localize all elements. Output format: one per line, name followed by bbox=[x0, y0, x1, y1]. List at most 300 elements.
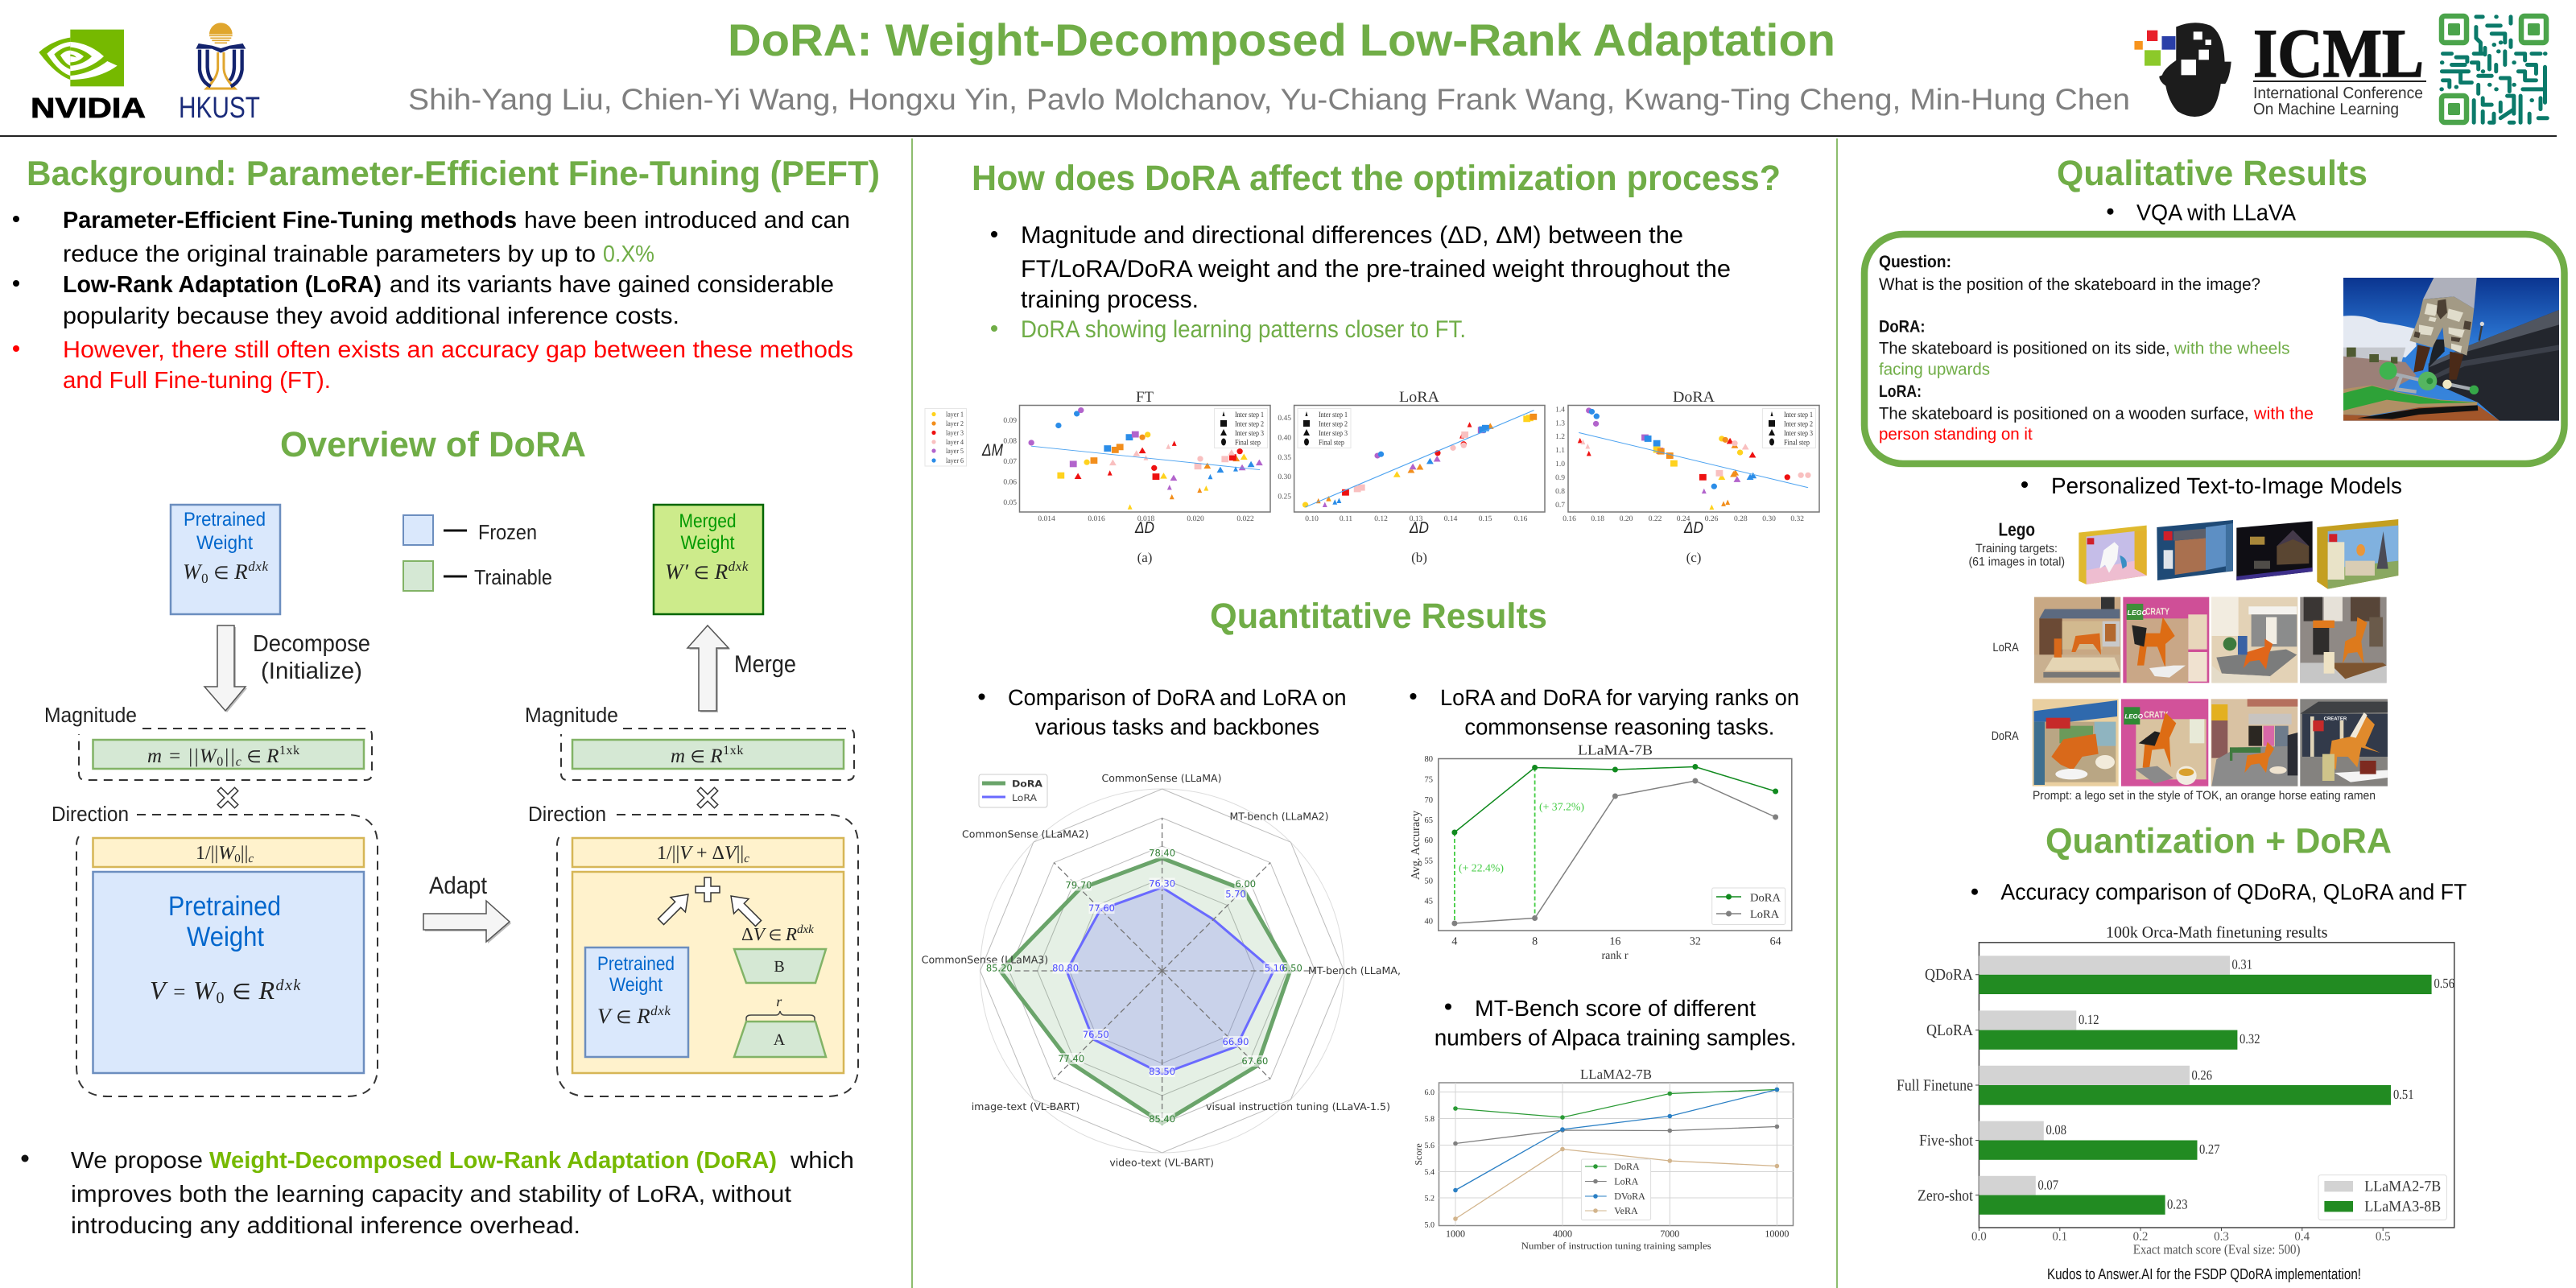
bar chart: 0.12 bbox=[2079, 1012, 2099, 1027]
direction block: right: Direction bbox=[528, 802, 606, 826]
line chart: LLaMA-7B ranks: rank r bbox=[1601, 950, 1629, 962]
radar chart: 80.80 bbox=[1052, 963, 1079, 974]
bar chart: Zero-shot bbox=[1918, 1187, 1973, 1204]
scatter chart: DoRA: 0.8 bbox=[1555, 488, 1565, 496]
arrow: pretrained to plus bbox=[654, 887, 696, 929]
right column divider bbox=[1836, 138, 1838, 1288]
bar chart: 0.07 bbox=[2038, 1177, 2058, 1193]
arrow: merge: Merge bbox=[734, 651, 796, 678]
scatter chart: DoRA: 1.4 bbox=[1555, 407, 1565, 415]
radar chart: CommonSense (LLaMA2) bbox=[962, 828, 1088, 840]
chart legend: DoRA bbox=[1614, 1161, 1640, 1172]
heading: quantitative: Quantitative Results bbox=[1210, 597, 1547, 636]
VQA text: with the wheels bbox=[2174, 339, 2289, 357]
direction block: left: dxk bbox=[276, 976, 302, 994]
scatter legend: layers: layer 5 bbox=[946, 447, 964, 455]
arrow: decompose: (Initialize) bbox=[261, 658, 362, 684]
magnitude block: right: m ∈ R bbox=[671, 745, 723, 767]
scatter chart: LoRA: Final step bbox=[1319, 440, 1344, 448]
lego caption: Lego bbox=[1998, 518, 2035, 539]
scatter chart: FT: 0.014 bbox=[1038, 515, 1055, 523]
text: accuracy comparison: Accuracy comparison of QDoRA, QLoRA and FT bbox=[2000, 879, 2467, 904]
scatter chart: LoRA: 0.40 bbox=[1278, 435, 1291, 443]
VQA text bbox=[1879, 253, 2314, 444]
image: DoRA sample 2: CRATY bbox=[2144, 710, 2168, 720]
image: DoRA sample 4 bbox=[2300, 699, 2388, 786]
text: rank caption bbox=[1410, 685, 1799, 739]
image: LoRA sample 2: LEGO bbox=[2128, 609, 2147, 617]
line chart: LLaMA2-7B samples: 5.2 bbox=[1425, 1195, 1435, 1203]
scatter chart: FT: 0.022 bbox=[1236, 515, 1254, 523]
direction block: left: || bbox=[241, 843, 248, 864]
image: LoRA sample 2: CRATY bbox=[2145, 605, 2169, 617]
line chart: LLaMA2-7B samples: 6.0 bbox=[1425, 1088, 1435, 1097]
scatter chart: LoRA: 0.25 bbox=[1278, 493, 1291, 501]
scatter chart: FT: Inter step 3 bbox=[1235, 430, 1264, 438]
direction block: left: V = W bbox=[150, 976, 216, 1005]
radar chart: 85.20 bbox=[986, 963, 1013, 974]
scatter chart: FT: FT bbox=[1136, 389, 1154, 406]
box: pretrained weight: Pretrained bbox=[184, 509, 266, 530]
scatter chart: DoRA: 0.24 bbox=[1677, 515, 1690, 523]
magnitude block: left: || bbox=[224, 745, 236, 767]
radar chart bbox=[922, 772, 1401, 1169]
scatter chart: DoRA: 1.1 bbox=[1555, 447, 1565, 455]
radar chart: image-text (VL-BART) bbox=[972, 1100, 1080, 1113]
scatter chart: DoRA: Inter step 2 bbox=[1784, 420, 1813, 428]
scatter chart: DoRA: 0.20 bbox=[1620, 515, 1633, 523]
VQA text: facing upwards bbox=[1879, 361, 1990, 379]
line chart: LLaMA-7B ranks: 75 bbox=[1425, 776, 1433, 784]
image: DoRA sample 2 bbox=[2121, 699, 2208, 786]
scatter chart: FT: 0.018 bbox=[1137, 515, 1154, 523]
scatter chart: LoRA: 0.10 bbox=[1305, 515, 1319, 523]
image: DoRA sample 2: LEGO bbox=[2124, 713, 2143, 720]
box: pretrained weight: ∈ bbox=[208, 563, 234, 583]
radar chart: 76.50 bbox=[1083, 1029, 1109, 1040]
text: MT-Bench caption bbox=[1435, 996, 1797, 1050]
bar chart: 0.1 bbox=[2052, 1230, 2067, 1243]
proposal text: improves both the learning capacity and stability of LoRA, without bbox=[71, 1182, 791, 1208]
magnitude block: left: 0 bbox=[217, 755, 224, 769]
radar chart: MT-bench (LLaMA2) bbox=[1230, 810, 1328, 823]
bar chart: 0.2 bbox=[2133, 1230, 2148, 1243]
box: pretrained weight: Weight bbox=[196, 532, 253, 554]
low-rank matrices: B bbox=[774, 958, 785, 976]
box: merged weight: dxk bbox=[729, 559, 749, 574]
authors: Shih-Yang Liu, Chien-Yi Wang, Hongxu Yin, Pavlo Molchanov, Yu-Chiang Frank Wang, Kwang-Ting Cheng, Min-Hung Chen bbox=[408, 83, 2130, 116]
proposal text bbox=[21, 1148, 854, 1239]
logo: ICML wordmark: On Machine Learning bbox=[2253, 101, 2399, 118]
image: LoRA sample 4 bbox=[2300, 597, 2387, 683]
image: target 1 bbox=[2079, 526, 2147, 584]
bullet list: background: Parameter-Efficient Fine-Tuning methods bbox=[63, 208, 517, 233]
chart legend: DVoRA bbox=[1614, 1191, 1645, 1202]
radar chart: 6.50 bbox=[1282, 963, 1302, 974]
heading: overview: Overview of DoRA bbox=[280, 425, 586, 464]
box: pretrained weight: R bbox=[234, 559, 248, 584]
caption: prompt: Prompt: a lego set in the style of TOK, an orange horse eating ramen bbox=[2033, 789, 2376, 803]
line chart: LLaMA-7B ranks: (+ 22.4%) bbox=[1459, 861, 1504, 874]
radar chart: 77.60 bbox=[1088, 902, 1115, 914]
scatter chart: LoRA: ΔD bbox=[1409, 519, 1429, 537]
scatter chart: DoRA: DoRA bbox=[1673, 389, 1715, 406]
panel: overview of DoRA bbox=[44, 425, 858, 1096]
icon: multiply left bbox=[211, 781, 245, 815]
low-rank matrices: ΔV ∈ R bbox=[741, 924, 797, 944]
radar legend bbox=[979, 774, 1047, 807]
panel: quantitative results bbox=[922, 597, 1799, 1251]
line chart: LLaMA2-7B samples: 4000 bbox=[1553, 1228, 1572, 1240]
direction block: left: ∈ bbox=[225, 980, 258, 1004]
radar legend: DoRA bbox=[1012, 778, 1042, 789]
line chart: LLaMA2-7B samples: 5.4 bbox=[1425, 1168, 1435, 1177]
scatter chart: DoRA: 0.22 bbox=[1649, 515, 1662, 523]
magnitude block: left: R bbox=[266, 745, 279, 767]
scatter chart: FT: 0.08 bbox=[1003, 438, 1017, 446]
bar legend: LLaMA3-8B bbox=[2364, 1199, 2441, 1216]
bar chart: 0.0 bbox=[1971, 1230, 1987, 1243]
scatter legend: layers: layer 3 bbox=[946, 428, 964, 436]
scatter chart: DoRA: 1.0 bbox=[1555, 460, 1565, 469]
bullet list: optimization: training process. bbox=[1021, 287, 1199, 313]
scatter chart: LoRA: Inter step 3 bbox=[1319, 430, 1348, 438]
line chart: LLaMA2-7B samples: 7000 bbox=[1660, 1228, 1679, 1240]
logo: HKUST bbox=[179, 23, 260, 124]
line chart: LLaMA-7B ranks: 8 bbox=[1532, 935, 1538, 948]
bar chart: 0.5 bbox=[2376, 1230, 2391, 1243]
scatter chart: LoRA: 0.15 bbox=[1479, 515, 1492, 523]
scatter chart: FT: 0.07 bbox=[1003, 458, 1017, 466]
scatter chart: DoRA: Final step bbox=[1784, 440, 1810, 448]
line chart: LLaMA2-7B samples: 5.0 bbox=[1425, 1220, 1435, 1230]
radar chart: CommonSense (LLaMA) bbox=[1101, 772, 1222, 784]
line chart: LLaMA-7B ranks bbox=[1410, 742, 1792, 962]
bar chart: QDoRA bbox=[1925, 966, 1973, 984]
magnitude block: left: Magnitude bbox=[44, 703, 137, 727]
scatter chart: DoRA: Inter step 1 bbox=[1784, 411, 1813, 419]
bar chart: 0.23 bbox=[2167, 1196, 2188, 1212]
box: inner pretrained weight: V ∈ R bbox=[597, 1004, 650, 1028]
heading: optimization: How does DoRA affect the optimization process? bbox=[972, 159, 1781, 198]
box: merged weight: W′ ∈ R bbox=[665, 559, 729, 584]
box: merged weight: Merged bbox=[679, 510, 736, 532]
radar chart: 76.30 bbox=[1149, 877, 1175, 889]
box: pretrained weight: 0 bbox=[201, 571, 208, 586]
scatter chart: DoRA: 0.18 bbox=[1591, 515, 1604, 523]
scatter chart: LoRA: Inter step 2 bbox=[1319, 420, 1348, 428]
proposal text: We propose bbox=[71, 1148, 203, 1174]
chart legend bbox=[1581, 1159, 1651, 1220]
line chart: LLaMA-7B ranks: 70 bbox=[1425, 796, 1433, 805]
line chart: LLaMA-7B ranks: 50 bbox=[1425, 877, 1433, 886]
radar chart: visual instruction tuning (LLaVA-1.5) bbox=[1206, 1100, 1390, 1113]
bullet list: optimization: DoRA showing learning patterns closer to FT. bbox=[1021, 316, 1466, 343]
direction block: left: c bbox=[248, 852, 254, 865]
bar chart: 0.27 bbox=[2199, 1141, 2220, 1157]
line chart: LLaMA-7B ranks: 16 bbox=[1609, 935, 1620, 948]
line chart: LLaMA-7B ranks: 65 bbox=[1425, 816, 1433, 825]
legend: frozen: Frozen bbox=[478, 520, 537, 544]
scatter chart: FT: 0.016 bbox=[1088, 515, 1105, 523]
QR code bbox=[2442, 16, 2547, 122]
image: LoRA sample 3 bbox=[2211, 597, 2297, 683]
radar chart: CommonSense (LLaMA3) bbox=[922, 953, 1048, 966]
scatter chart: DoRA: 0.7 bbox=[1555, 502, 1565, 510]
direction block: left bbox=[52, 802, 378, 1096]
radar chart: 6.00 bbox=[1235, 878, 1256, 890]
proposal text: which bbox=[790, 1148, 854, 1174]
scatter chart: DoRA: 0.26 bbox=[1705, 515, 1719, 523]
box: inner pretrained weight bbox=[585, 947, 688, 1057]
VQA text: What is the position of the skateboard in the image? bbox=[1879, 275, 2260, 294]
bullet list: background: 0.X% bbox=[603, 242, 654, 267]
chart legend: DoRA bbox=[1750, 892, 1781, 905]
panel: qualitative results bbox=[1864, 154, 2565, 803]
image: target 2 bbox=[2157, 520, 2233, 580]
scatter chart: DoRA: ΔD bbox=[1683, 519, 1703, 537]
arrow: merge bbox=[687, 625, 796, 712]
text: VQA with LLaVA: VQA with LLaVA bbox=[2136, 200, 2296, 225]
line chart: LLaMA-7B ranks: 64 bbox=[1770, 935, 1781, 948]
direction block: left: 1/||W bbox=[196, 843, 234, 864]
low-rank matrices: r bbox=[776, 993, 782, 1009]
scatter chart: DoRA: 1.3 bbox=[1555, 419, 1565, 427]
icon: multiply right bbox=[691, 781, 724, 815]
scatter chart: FT: 0.05 bbox=[1003, 499, 1017, 507]
header rule bbox=[0, 135, 2557, 137]
logo: ICML wordmark bbox=[2253, 14, 2426, 118]
scatter chart: DoRA: (c) bbox=[1686, 550, 1701, 565]
box: inner pretrained weight: Pretrained bbox=[597, 953, 675, 975]
bar chart: 0.51 bbox=[2393, 1087, 2413, 1102]
line chart: LLaMA2-7B samples: 10000 bbox=[1765, 1228, 1789, 1240]
line chart: LLaMA2-7B samples: Number of instruction tuning training samples bbox=[1521, 1240, 1711, 1251]
image: LoRA sample 1 bbox=[2034, 597, 2120, 683]
low-rank matrices bbox=[734, 923, 826, 1057]
bullet list: optimization: FT/LoRA/DoRA weight and the pre-trained weight throughout the bbox=[1021, 256, 1731, 283]
scatter chart: DoRA: 0.28 bbox=[1734, 515, 1748, 523]
radar chart: video-text (VL-BART) bbox=[1109, 1156, 1214, 1169]
line chart: LLaMA-7B ranks: 40 bbox=[1425, 918, 1433, 926]
magnitude block: left: 1xk bbox=[279, 744, 300, 758]
panel: background bbox=[13, 155, 880, 394]
box: pretrained weight: W bbox=[183, 559, 201, 584]
radar chart: 77.40 bbox=[1058, 1053, 1084, 1064]
scatter chart: LoRA: 0.13 bbox=[1410, 515, 1423, 523]
arrow: decompose: Decompose bbox=[253, 631, 370, 657]
magnitude block: right: 1xk bbox=[723, 744, 744, 758]
scatter chart: FT: 0.020 bbox=[1187, 515, 1204, 523]
VQA text: Question: bbox=[1879, 253, 1951, 271]
bullet list: background: reduce the original trainable parameters by up to bbox=[63, 242, 596, 267]
logo: ICML wordmark: ICML bbox=[2253, 14, 2424, 92]
panel: optimization process bbox=[925, 159, 1819, 565]
scatter chart: DoRA: 0.30 bbox=[1762, 515, 1776, 523]
logo: HKUST: HKUST bbox=[179, 91, 260, 124]
VQA text: DoRA: bbox=[1879, 318, 1926, 336]
direction block: left: 0 bbox=[216, 989, 225, 1007]
image: target 4 bbox=[2317, 519, 2398, 589]
text: rank caption: LoRA and DoRA for varying ranks on bbox=[1440, 685, 1799, 710]
radar chart: 83.50 bbox=[1149, 1066, 1175, 1077]
text: MT-Bench caption: MT-Bench score of different bbox=[1475, 996, 1756, 1021]
direction block: left: Pretrained bbox=[168, 891, 281, 922]
legend: trainable bbox=[403, 561, 552, 591]
radar chart: 85.40 bbox=[1149, 1113, 1175, 1125]
box: pretrained weight: dxk bbox=[248, 559, 269, 574]
line chart: LLaMA2-7B samples: Score bbox=[1413, 1143, 1424, 1166]
low-rank matrices: dxk bbox=[797, 923, 814, 936]
arrow: adapt: Adapt bbox=[429, 873, 488, 899]
scatter chart: LoRA: 0.45 bbox=[1278, 415, 1291, 423]
scatter chart: FT: Final step bbox=[1235, 440, 1261, 448]
bar chart: 0.26 bbox=[2191, 1067, 2212, 1083]
low-rank matrices: A bbox=[774, 1031, 786, 1049]
scatter chart: FT bbox=[981, 389, 1270, 565]
bar chart: 0.3 bbox=[2214, 1230, 2229, 1243]
direction block: right bbox=[528, 802, 858, 1096]
text: personalized models: Personalized Text-to-Image Models bbox=[2051, 473, 2402, 498]
scatter chart: FT: ΔD bbox=[1134, 519, 1154, 537]
heading: qualitative: Qualitative Results bbox=[2057, 154, 2368, 193]
scatter chart: FT: Inter step 1 bbox=[1235, 411, 1264, 419]
bullet list: optimization: Magnitude and directional differences (ΔD, ΔM) between the bbox=[1021, 222, 1683, 249]
line chart: LLaMA2-7B samples: 5.8 bbox=[1425, 1115, 1435, 1124]
line chart: LLaMA2-7B samples bbox=[1413, 1067, 1794, 1251]
lego caption: Training targets: bbox=[1975, 542, 2058, 555]
title: DoRA: Weight-Decomposed Low-Rank Adaptation bbox=[728, 14, 1835, 65]
bar chart: 100k Orca-Math finetuning results bbox=[2106, 924, 2328, 942]
icon: plus bbox=[696, 877, 720, 902]
scatter chart: LoRA: 0.12 bbox=[1374, 515, 1388, 523]
box: inner pretrained weight: Weight bbox=[609, 974, 663, 996]
bar chart: Five-shot bbox=[1919, 1132, 1973, 1150]
bullet list: background: and its variants have gained considerable bbox=[390, 272, 834, 298]
radar legend: LoRA bbox=[1012, 792, 1037, 803]
bar chart: QLoRA bbox=[1926, 1022, 1973, 1039]
radar chart: 5.10 bbox=[1265, 963, 1285, 974]
bullet list: background: have been introduced and can bbox=[524, 208, 850, 233]
panel: quantization bbox=[1897, 822, 2467, 1283]
left column divider bbox=[911, 138, 913, 1288]
scatter chart: LoRA: 0.14 bbox=[1444, 515, 1458, 523]
VQA text: person standing on it bbox=[1879, 425, 2033, 444]
chart legend: VeRA bbox=[1614, 1205, 1638, 1216]
bullet list: background: Low-Rank Adaptation (LoRA) bbox=[63, 272, 382, 298]
radar chart: 78.40 bbox=[1149, 847, 1175, 858]
direction block: left: Direction bbox=[52, 802, 129, 826]
line chart: LLaMA-7B ranks: Avg. Accuracy bbox=[1410, 811, 1422, 880]
lego caption bbox=[1969, 518, 2065, 568]
text: radar caption bbox=[979, 685, 1346, 739]
bar legend: LLaMA2-7B bbox=[2364, 1179, 2441, 1195]
scatter legend: layers: layer 2 bbox=[946, 419, 964, 427]
scatter chart: LoRA: (b) bbox=[1411, 550, 1427, 565]
logo: NVIDIA: NVIDIA bbox=[31, 93, 146, 124]
VQA callout bbox=[1864, 234, 2565, 464]
scatter chart: DoRA: 1.2 bbox=[1555, 433, 1565, 441]
scatter chart: FT: ΔM bbox=[981, 441, 1003, 460]
line chart: LLaMA-7B ranks: 32 bbox=[1690, 935, 1701, 948]
direction block: left: 0 bbox=[234, 852, 241, 865]
bar chart: 0.08 bbox=[2046, 1122, 2066, 1137]
scatter chart: LoRA: Inter step 1 bbox=[1319, 411, 1348, 419]
lego caption: (61 images in total) bbox=[1969, 555, 2065, 568]
magnitude block: right: Magnitude bbox=[525, 703, 618, 727]
bullet list: background: and Full Fine-tuning (FT). bbox=[63, 368, 331, 394]
radar chart: 66.90 bbox=[1223, 1036, 1249, 1047]
arrow: delta to plus bbox=[724, 889, 766, 931]
bar chart: 0.31 bbox=[2231, 956, 2252, 972]
scatter chart: DoRA: 0.32 bbox=[1790, 515, 1804, 523]
bullet list: optimization bbox=[991, 222, 1731, 343]
line chart: LLaMA-7B ranks: 45 bbox=[1425, 897, 1433, 906]
scatter chart: DoRA: 0.16 bbox=[1563, 515, 1576, 523]
logo: NVIDIA bbox=[31, 30, 146, 124]
chart legend bbox=[1712, 888, 1785, 924]
scatter chart: FT: (a) bbox=[1137, 550, 1152, 565]
line chart: LLaMA-7B ranks: 60 bbox=[1425, 836, 1433, 845]
image: target 3 bbox=[2236, 521, 2313, 580]
bar chart: 0.32 bbox=[2240, 1031, 2260, 1046]
radar chart: 5.70 bbox=[1225, 889, 1246, 900]
image: LoRA sample 2 bbox=[2123, 597, 2209, 683]
magnitude block: left: c bbox=[236, 755, 242, 769]
VQA text: The skateboard is positioned on a wooden surface, bbox=[1879, 404, 2249, 423]
heading: quantization: Quantization + DoRA bbox=[2046, 822, 2392, 861]
bar chart: Exact match score (Eval size: 500) bbox=[2133, 1242, 2301, 1257]
bar chart: Full Finetune bbox=[1897, 1077, 1973, 1095]
radar chart: 67.60 bbox=[1241, 1055, 1268, 1067]
label: LoRA row: LoRA bbox=[1992, 641, 2019, 654]
VQA text: The skateboard is positioned on its side, bbox=[1879, 339, 2170, 357]
magnitude block: left bbox=[44, 703, 372, 780]
magnitude block: left: m = ||W bbox=[147, 745, 217, 767]
scatter chart: FT: 0.06 bbox=[1003, 478, 1017, 486]
radar chart: 79.70 bbox=[1066, 879, 1092, 890]
proposal text: Weight-Decomposed Low-Rank Adaptation (DoRA) bbox=[209, 1148, 777, 1174]
radar chart: MT-bench (LLaMA, bbox=[1308, 964, 1401, 976]
box: merged weight bbox=[654, 505, 763, 614]
proposal text: introducing any additional inference overhead. bbox=[71, 1213, 580, 1239]
arrow: adapt bbox=[423, 873, 511, 943]
scatter chart: DoRA: Inter step 3 bbox=[1784, 430, 1813, 438]
logo: ICML wordmark: International Conference bbox=[2253, 85, 2423, 102]
chart legend: LoRA bbox=[1750, 909, 1780, 921]
line chart: LLaMA2-7B samples: 1000 bbox=[1446, 1228, 1465, 1240]
label: DoRA row: DoRA bbox=[1992, 729, 2019, 743]
box: merged weight: Weight bbox=[681, 532, 735, 554]
scatter chart: LoRA: LoRA bbox=[1399, 389, 1439, 406]
box: inner pretrained weight: dxk bbox=[650, 1003, 671, 1018]
scatter chart: DoRA bbox=[1555, 389, 1819, 565]
image: DoRA sample 1 bbox=[2033, 699, 2119, 786]
image: skateboard photo bbox=[2343, 278, 2559, 421]
legend: trainable: Trainable bbox=[474, 565, 552, 589]
legend: frozen bbox=[403, 515, 537, 545]
bullet list: background bbox=[13, 208, 853, 394]
arrow: decompose bbox=[204, 625, 370, 712]
scatter chart: LoRA bbox=[1278, 389, 1545, 565]
magnitude block: right bbox=[525, 703, 854, 780]
scatter chart: LoRA: 0.30 bbox=[1278, 473, 1291, 481]
text: radar caption: Comparison of DoRA and LoRA on bbox=[1008, 685, 1346, 710]
bar chart: 0.4 bbox=[2294, 1230, 2310, 1243]
bullet list: background: popularity because they avoid additional inference costs. bbox=[63, 303, 679, 329]
line chart: LLaMA-7B ranks: (+ 37.2%) bbox=[1539, 800, 1584, 813]
logo: ICML head bbox=[2134, 23, 2231, 117]
